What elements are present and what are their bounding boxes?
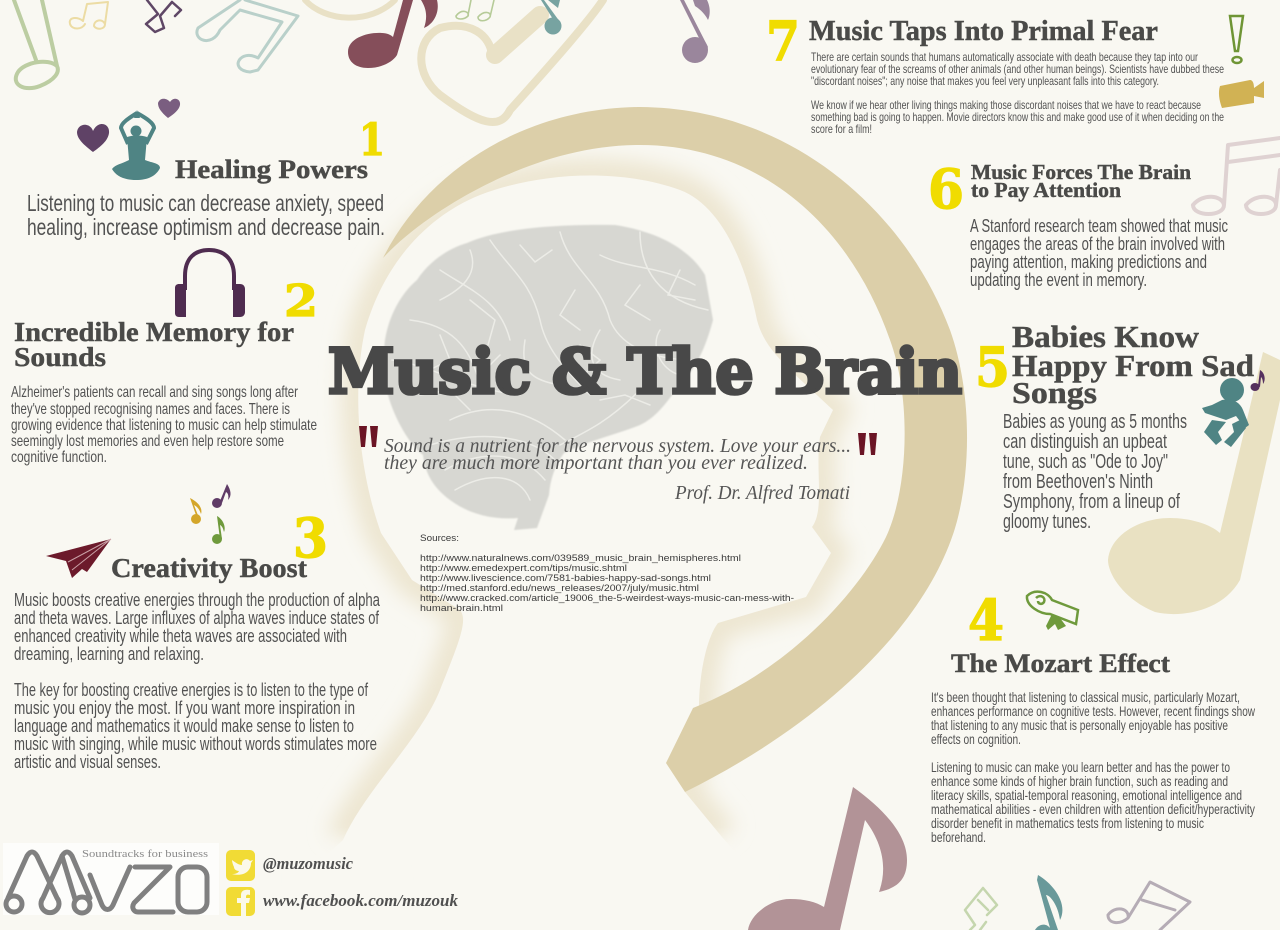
heading: Creativity Boost [111, 553, 307, 583]
big mauve note bottom [748, 787, 907, 930]
sources [420, 533, 794, 614]
brain illustration [384, 225, 713, 530]
icon: baby [1202, 378, 1249, 447]
number 1: 1 [359, 115, 385, 166]
heading: to Pay Attention [971, 178, 1121, 202]
icon: exclamation mark [1230, 16, 1243, 63]
body text: updating the event in memory. [970, 270, 1147, 290]
body text: Music boosts creative energies through the production of alpha [14, 590, 381, 610]
icon: film camera [1219, 80, 1264, 108]
body text [27, 190, 385, 240]
body text: Listening to music can decrease anxiety, speed [27, 190, 384, 216]
heading: Music Forces The Brain [971, 160, 1191, 184]
body text: Symphony, from a lineup of [1003, 491, 1180, 513]
number 5: 5 [975, 335, 1010, 399]
body text [1003, 411, 1187, 533]
icon: hearts [77, 99, 180, 152]
body text: can distinguish an upbeat [1003, 431, 1167, 453]
sources: http://www.emedexpert.com/tips/music.shtml [420, 563, 627, 574]
heading: Songs [1012, 375, 1097, 410]
icon: twitter [226, 850, 255, 881]
icon: small note [1250, 370, 1265, 391]
section 5: babies [975, 319, 1265, 533]
body text: language and mathematics it would make sense to listen to [14, 716, 354, 736]
section 4: mozart [931, 588, 1256, 845]
body text: enhanced creativity while theta waves are associated with [14, 626, 347, 646]
body text: The key for boosting creative energies is to listen to the type of [14, 680, 369, 700]
sources: http://www.naturalnews.com/039589_music_brain_hemispheres.html [420, 553, 741, 564]
headphone band [383, 107, 967, 792]
quote text: Sound is a nutrient for the nervous system. Love your ears... [384, 435, 851, 457]
teal note top [541, 0, 562, 34]
body text: growing evidence that listening to music can help stimulate [11, 417, 317, 434]
body text: Babies as young as 5 months [1003, 411, 1187, 433]
quote text: they are much more important than you ever realized. [384, 452, 808, 474]
body text: from Beethoven's Ninth [1003, 471, 1153, 493]
handle text: @muzomusic [263, 854, 353, 873]
maroon note [348, 0, 438, 68]
number 7: 7 [766, 9, 800, 73]
sources: human-brain.html [420, 603, 503, 614]
heading: Sounds [14, 342, 106, 372]
quotation marks [359, 426, 877, 455]
body text [931, 689, 1256, 845]
quote [359, 426, 877, 504]
twitter handle [226, 850, 353, 881]
icon: three notes [190, 484, 231, 544]
heading [14, 317, 294, 372]
sources: http://med.stanford.edu/news_releases/2007/july/music.html [420, 583, 699, 594]
head silhouette with headphone band [300, 107, 967, 880]
body text: music you enjoy the most. If you want more inspiration in [14, 698, 355, 718]
heading [971, 160, 1191, 202]
body text: and theta waves. Large influxes of alpha waves induce states of [14, 608, 380, 628]
number 4: 4 [968, 588, 1004, 654]
heading: Healing Powers [175, 155, 368, 184]
number 2: 2 [284, 276, 318, 327]
section 1: healing powers [27, 99, 385, 240]
body text: beforehand. [931, 829, 986, 845]
number 6: 6 [928, 157, 964, 221]
title: Music & The Brain [328, 335, 962, 408]
body text: effects on cognition. [931, 731, 1021, 747]
section 7: primal fear [766, 9, 1264, 136]
heading: Happy From Sad [1012, 348, 1254, 383]
big tan note right [1108, 352, 1280, 614]
purple note top [680, 0, 710, 63]
heading [1012, 319, 1254, 410]
heading: Music Taps Into Primal Fear [809, 16, 1158, 47]
heading: Babies Know [1012, 319, 1200, 354]
section 2: memory [11, 250, 318, 466]
body text: healing, increase optimism and decrease pain. [27, 214, 385, 240]
heading: Incredible Memory for [14, 317, 294, 347]
body text: score for a film! [811, 122, 872, 136]
sources: http://www.cracked.com/article_19006_the-5-weirdest-ways-music-can-mess-with- [420, 593, 794, 604]
body text: cognitive function. [11, 449, 107, 466]
body text [11, 384, 317, 466]
body text: Alzheimer's patients can recall and sing songs long after [11, 384, 298, 401]
icon: headphones [175, 250, 245, 317]
logo: muzo: Soundtracks for business [82, 848, 208, 860]
icon: diploma scroll [1027, 592, 1078, 630]
quote text [384, 435, 851, 474]
icon: paper plane [46, 539, 111, 578]
body text [14, 590, 381, 772]
link text: www.facebook.com/muzouk [263, 891, 458, 910]
heading: The Mozart Effect [951, 649, 1170, 678]
body text [970, 216, 1228, 290]
icon: facebook [226, 887, 255, 916]
body text: they've stopped recognising names and faces. There is [11, 401, 290, 418]
teal note bottom [1035, 875, 1062, 930]
icon: meditating figure [112, 110, 160, 180]
section 6: attention [928, 157, 1228, 290]
body text: "discordant noises"; any noise that makes you feel very unpleasant falls into this category. [811, 74, 1159, 88]
logo: muzo [3, 843, 219, 915]
body text [811, 50, 1224, 136]
sources: Sources: [420, 533, 459, 544]
number 3: 3 [293, 506, 328, 570]
body text: music with singing, while music without words stimulates more [14, 734, 377, 754]
sources: http://www.livescience.com/7581-babies-happy-sad-songs.html [420, 573, 711, 584]
quote attribution: Prof. Dr. Alfred Tomati [674, 482, 850, 504]
body text: gloomy tunes. [1003, 511, 1091, 533]
body text: dreaming, learning and relaxing. [14, 644, 204, 664]
section 3: creativity [14, 484, 381, 772]
body text: seemingly lost memories and even help restore some [11, 433, 284, 450]
facebook link [226, 887, 458, 916]
body text: artistic and visual senses. [14, 752, 161, 772]
body text: tune, such as "Ode to Joy" [1003, 451, 1168, 473]
